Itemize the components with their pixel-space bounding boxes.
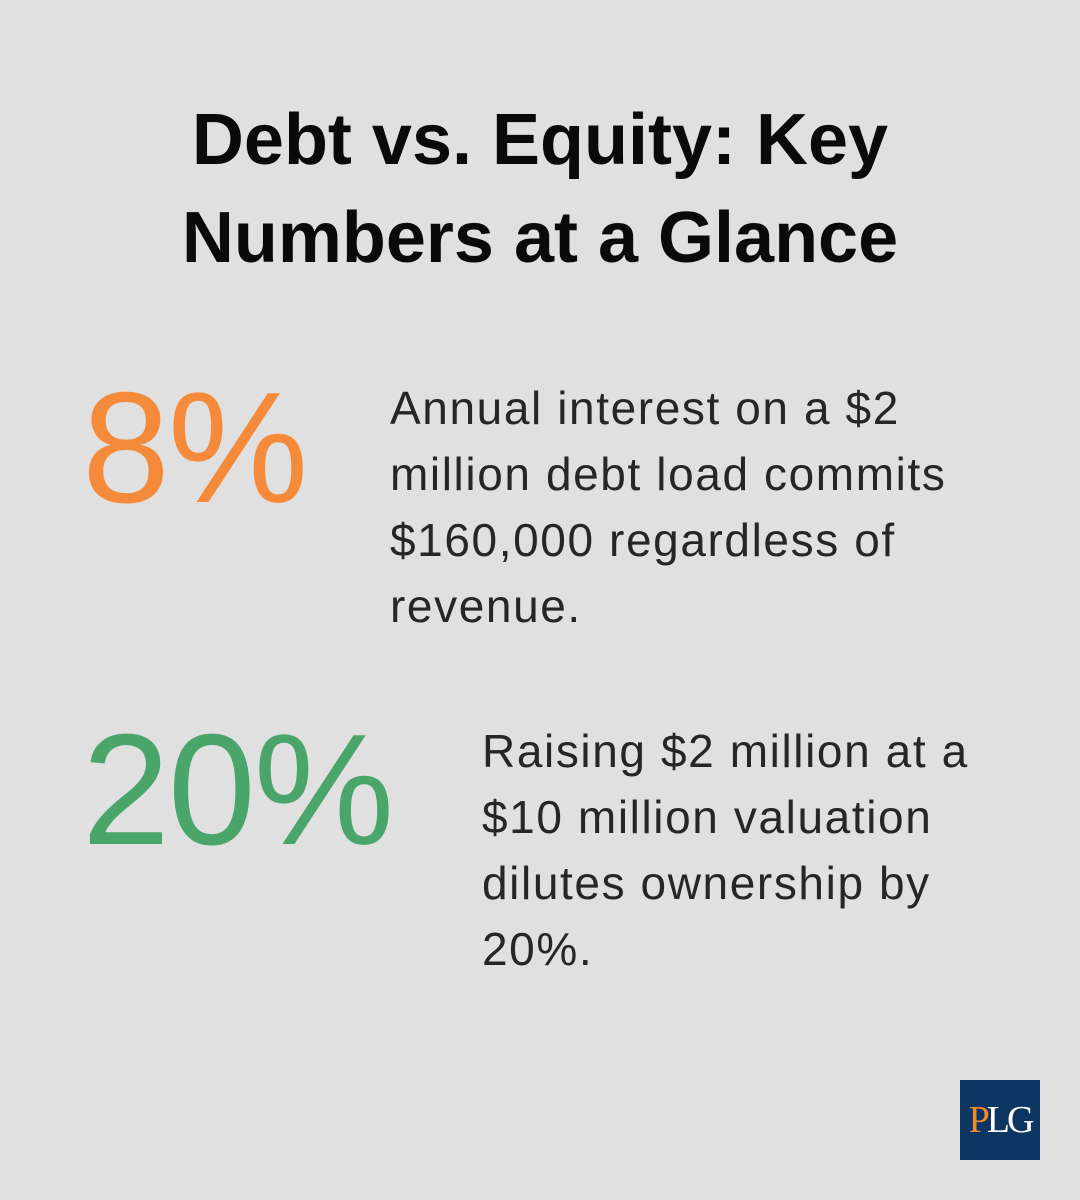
- text: debt description: million debt load commits: [390, 448, 946, 500]
- text: debt description: $160,000 regardless of: [390, 514, 896, 566]
- text: equity description: $10 million valuation: [482, 791, 932, 843]
- title: Debt vs. Equity: Key: [192, 100, 888, 180]
- text: debt description: revenue.: [390, 580, 582, 632]
- text: equity description: dilutes ownership by: [482, 857, 931, 909]
- logo: PLG: [960, 1080, 1040, 1160]
- text: equity description: [482, 725, 969, 975]
- title: Numbers at a Glance: [182, 198, 898, 278]
- text: equity description: 20%.: [482, 923, 593, 975]
- title: [182, 100, 898, 278]
- text: debt description: Annual interest on a $2: [390, 382, 900, 434]
- logo: PLG: PLG: [969, 1099, 1031, 1141]
- text: debt description: [390, 382, 946, 632]
- stat: 20%: 20%: [82, 702, 392, 878]
- text: equity description: Raising $2 million at a: [482, 725, 969, 777]
- stat: 8%: 8%: [82, 360, 306, 536]
